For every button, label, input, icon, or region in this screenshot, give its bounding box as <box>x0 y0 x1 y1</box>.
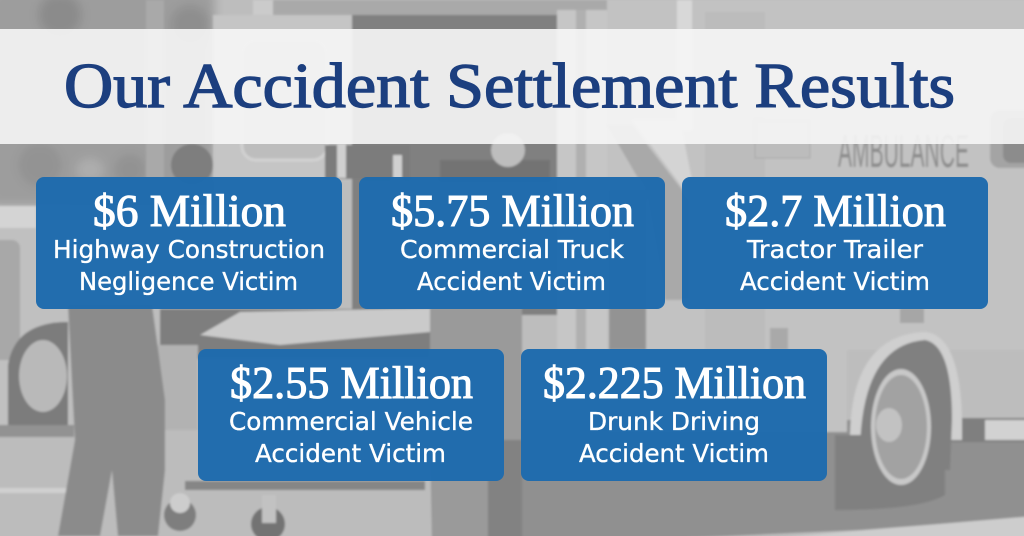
card: $2.7 Million <box>682 177 988 309</box>
description: Accident Victim <box>417 267 606 296</box>
card: $6 Million <box>36 177 342 309</box>
description <box>579 407 769 468</box>
description <box>53 235 325 296</box>
description: Highway Construction <box>53 235 325 264</box>
left car <box>0 206 70 428</box>
description: Commercial Truck <box>400 235 625 264</box>
card: $2.55 Million <box>198 349 504 481</box>
description <box>229 407 473 468</box>
amount: $2.55 Million <box>230 357 473 408</box>
description: Accident Victim <box>579 439 769 468</box>
description: Drunk Driving <box>588 407 760 436</box>
description: Negligence Victim <box>79 267 298 296</box>
left responder <box>58 305 165 536</box>
amount: $2.7 Million <box>725 185 946 236</box>
title: Our Accident Settlement Results <box>64 50 955 121</box>
right responder <box>430 305 522 536</box>
card: $2.225 Million <box>521 349 827 481</box>
description <box>400 235 625 296</box>
road and shadow <box>0 430 1024 536</box>
description <box>740 235 930 296</box>
description: Accident Victim <box>255 439 446 468</box>
description: Accident Victim <box>740 267 930 296</box>
amount: $6 Million <box>93 185 286 236</box>
title band <box>0 29 1024 144</box>
card: $5.75 Million <box>359 177 665 309</box>
stretcher and equipment <box>160 309 430 359</box>
description: Commercial Vehicle <box>229 407 473 436</box>
ambulance wheel <box>850 332 962 440</box>
amount: $5.75 Million <box>391 185 634 236</box>
amount: $2.225 Million <box>543 357 806 408</box>
description: Tractor Trailer <box>746 235 924 264</box>
